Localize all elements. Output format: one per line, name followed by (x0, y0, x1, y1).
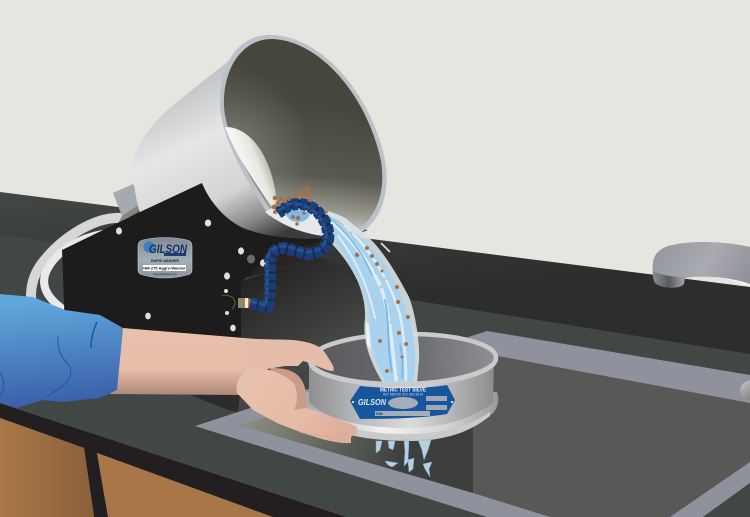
plate title: METRIC TEST SIEVE (380, 388, 426, 394)
label footer: www.globalgilson.com (153, 273, 177, 276)
drum interior (224, 39, 382, 232)
arm and hand (110, 328, 357, 443)
sink basin shaded side (238, 356, 498, 493)
water splash (381, 243, 390, 252)
cabinet front (0, 403, 347, 517)
drum body (133, 58, 368, 260)
sieve lower ring (305, 392, 498, 437)
faded particles (336, 220, 393, 324)
faucet (653, 242, 750, 288)
drum inner opening (225, 127, 277, 206)
sleeve fold lines (0, 322, 97, 397)
plate logo: GILSON (358, 398, 386, 407)
label model name: HM-275 Aggre-Washer (143, 266, 186, 270)
sieve rim back (310, 332, 496, 386)
sink basin floor (473, 356, 750, 517)
label logo band (164, 253, 186, 256)
blue splash in lip (284, 210, 310, 222)
water deep streaks (330, 218, 403, 378)
drum rim (220, 35, 387, 236)
plate serial label: S/N (376, 411, 383, 416)
backsplash (0, 192, 750, 356)
water drips below sieve (376, 440, 432, 477)
water main body (322, 212, 415, 382)
housing brown strip (247, 240, 332, 278)
machine foot shadow (188, 394, 240, 412)
palm shadow (270, 368, 307, 412)
sieve interior back (309, 332, 497, 386)
pour lip (265, 206, 362, 237)
water outer sheen (315, 207, 419, 383)
sieve back (305, 332, 498, 441)
sieve lower edge (312, 412, 490, 441)
palm and fingers (237, 368, 357, 443)
sieve front (309, 358, 496, 428)
plate screws (352, 401, 453, 403)
label logo globe (144, 242, 154, 252)
sink corner counter (703, 483, 750, 517)
plate serial bar (375, 411, 430, 416)
plate field boxes (426, 396, 447, 410)
wrist and thumb base (244, 339, 334, 371)
plate oval (388, 397, 418, 409)
gravel particles (272, 187, 410, 373)
plate standards: ISO 565 BS 410 ISO 3310 (383, 392, 423, 396)
mounting bracket (113, 184, 142, 224)
cabinet door right (97, 453, 275, 517)
sink (195, 331, 750, 517)
water side splash (366, 322, 371, 350)
label model heading: RAPID WASHER (151, 259, 179, 263)
countertop (0, 234, 750, 517)
flexible coolant hose (250, 204, 328, 307)
shirt sleeve (0, 294, 123, 408)
machine housing (62, 183, 330, 345)
sink rim (195, 331, 750, 517)
drain cap (740, 380, 750, 400)
nozzle fitting (222, 295, 252, 309)
housing screws (116, 219, 266, 331)
sieve wall (309, 358, 494, 428)
sieve nameplate (350, 385, 455, 419)
white hoses (31, 218, 122, 310)
forearm (110, 328, 300, 395)
sieve front rim (310, 358, 496, 385)
cabinet frame (0, 403, 347, 517)
finger crease (300, 432, 346, 437)
water stream (315, 207, 419, 383)
wall shading behind machine (241, 256, 372, 356)
machine label plate (138, 238, 192, 278)
cabinet door left (0, 418, 94, 517)
label white bar (143, 265, 186, 271)
label logo: GILSON (149, 244, 188, 256)
water light streaks (332, 222, 406, 380)
